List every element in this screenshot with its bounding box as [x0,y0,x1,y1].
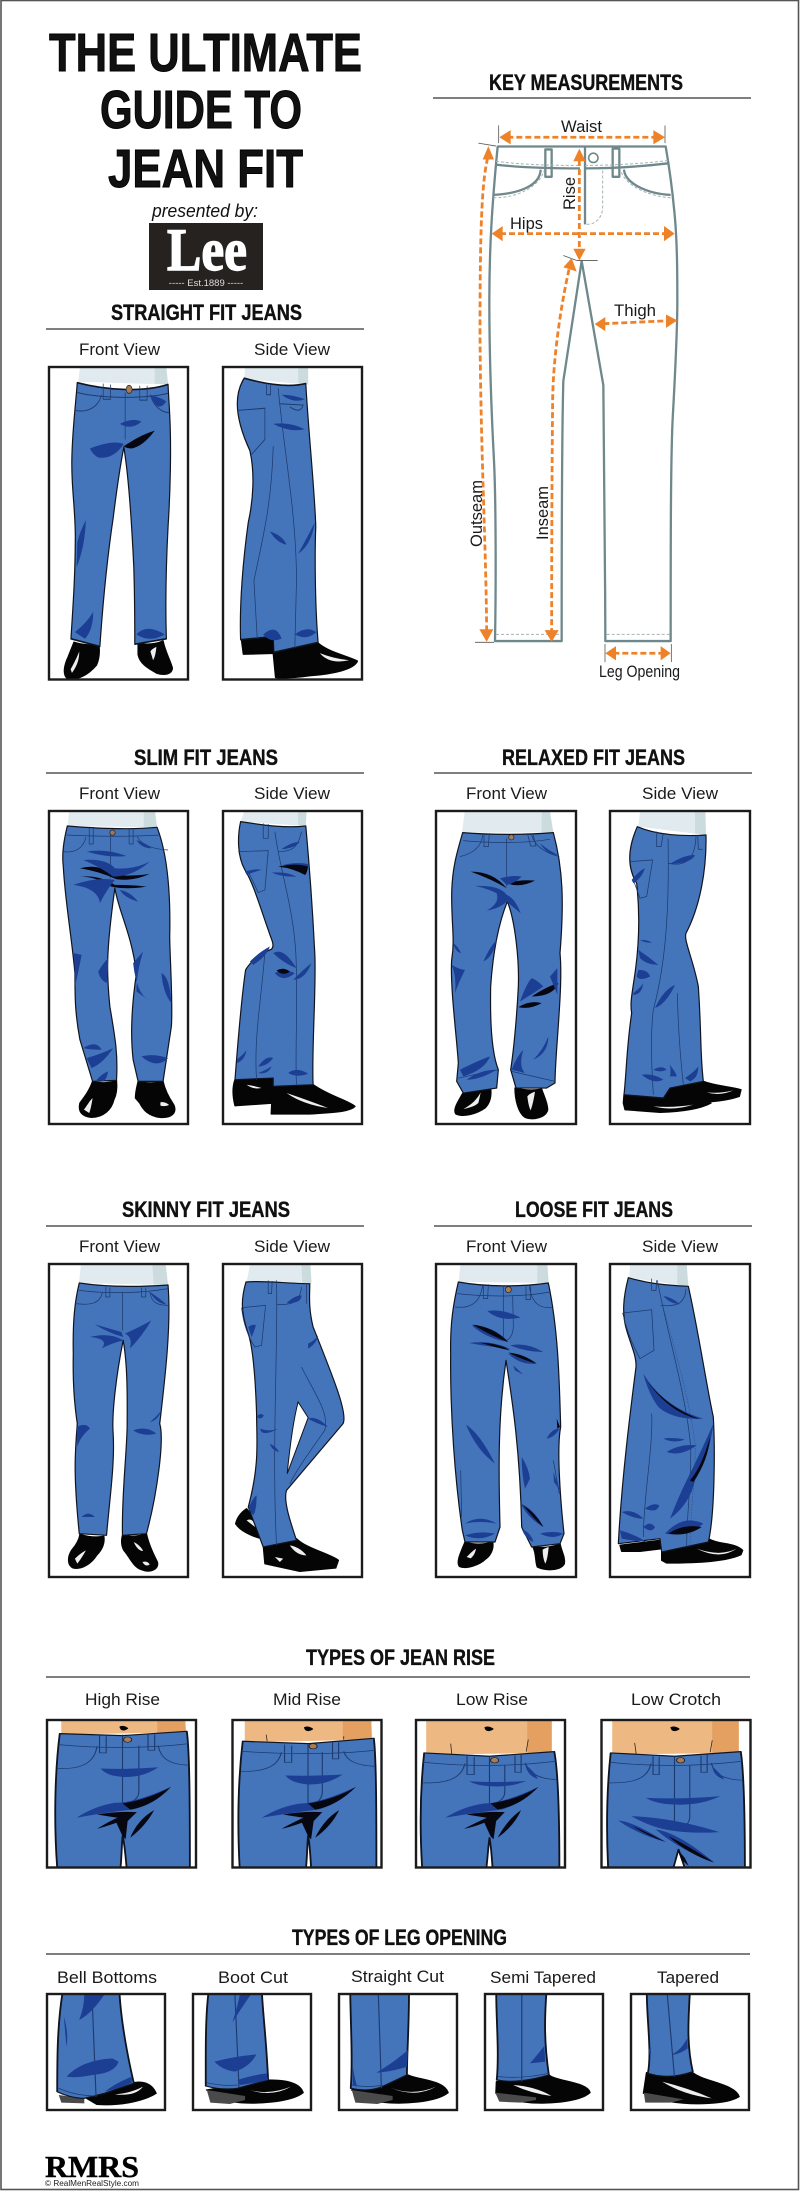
panel: straight cut [339,1994,457,2110]
label: straight side view: Side View [254,340,331,359]
label: high rise: High Rise [85,1690,160,1709]
title: JEAN FIT [108,139,303,199]
panel: bell bottoms [47,1994,165,2110]
panel: boot cut [193,1994,311,2110]
panel: high rise [47,1720,196,1868]
heading: types of leg opening: TYPES OF LEG OPENING [292,1925,507,1950]
label: relaxed front view: Front View [466,784,548,803]
label: mid rise: Mid Rise [273,1690,341,1709]
title: GUIDE TO [100,80,302,140]
arrow: leg opening [605,646,671,660]
label: skinny side view: Side View [254,1237,331,1256]
arrow: inseam [545,258,577,642]
label: straight cut: Straight Cut [351,1967,444,1986]
label: slim side view: Side View [254,784,331,803]
panel: skinny side view [223,1264,362,1577]
label: bell bottoms: Bell Bottoms [57,1968,157,1987]
logo: Lee: Lee [167,217,247,283]
label: low rise: Low Rise [456,1690,528,1709]
panel: semi tapered [485,1994,603,2110]
arrow: outseam [479,146,494,642]
key measurements heading: KEY MEASUREMENTS [489,70,683,95]
heading: straight fit: STRAIGHT FIT JEANS [111,300,302,325]
heading: loose fit: LOOSE FIT JEANS [515,1197,673,1222]
panel: skinny front view [49,1264,188,1577]
label: tapered: Tapered [657,1968,719,1987]
label: skinny front view: Front View [79,1237,161,1256]
heading: slim fit: SLIM FIT JEANS [134,745,278,770]
heading: relaxed fit: RELAXED FIT JEANS [502,745,685,770]
panel: slim side view [223,811,362,1124]
title [49,23,362,199]
logo: RMRS footer: © RealMenRealStyle.com [45,2179,139,2188]
label: relaxed side view: Side View [642,784,719,803]
arrow: rise [573,149,586,261]
panel: relaxed front view [436,811,576,1124]
panel: slim front view [49,811,188,1124]
label: inseam: Inseam [533,486,552,540]
logo: Lee: ----- Est.1889 ----- [169,278,243,289]
panel: mid rise [232,1720,382,1868]
arrow: thigh [595,314,677,331]
label: outseam: Outseam [467,480,486,547]
label: leg opening: Leg Opening [599,662,680,681]
presented by text: presented by: [151,201,258,221]
heading: skinny fit: SKINNY FIT JEANS [122,1197,290,1222]
label: rise: Rise [560,177,579,210]
label: low crotch: Low Crotch [631,1690,721,1709]
arrow: waist [499,130,665,144]
panel: tapered [631,1994,749,2110]
label: thigh: Thigh [614,301,656,320]
label: straight front view: Front View [79,340,161,359]
label: loose side view: Side View [642,1237,719,1256]
logo: RMRS footer: RMRS [45,2149,139,2184]
icon: jeans outline [489,146,677,641]
label: waist: Waist [561,117,602,136]
panel: loose side view [610,1264,750,1577]
label: slim front view: Front View [79,784,161,803]
panel: relaxed side view [610,811,750,1124]
title: THE ULTIMATE [49,23,362,83]
chart: jeans measurement diagram [467,117,680,681]
panel: low rise [416,1720,565,1868]
panel: loose front view [436,1264,576,1577]
label: boot cut: Boot Cut [218,1968,288,1987]
panel: low crotch [602,1720,750,1868]
panel: straight front view [49,367,188,680]
heading: types of jean rise: TYPES OF JEAN RISE [306,1645,495,1670]
label: hips: Hips [510,214,543,233]
label: loose front view: Front View [466,1237,548,1256]
panel: straight side view [223,367,362,680]
arrow: hips [492,226,675,241]
label: semi tapered: Semi Tapered [490,1968,596,1987]
